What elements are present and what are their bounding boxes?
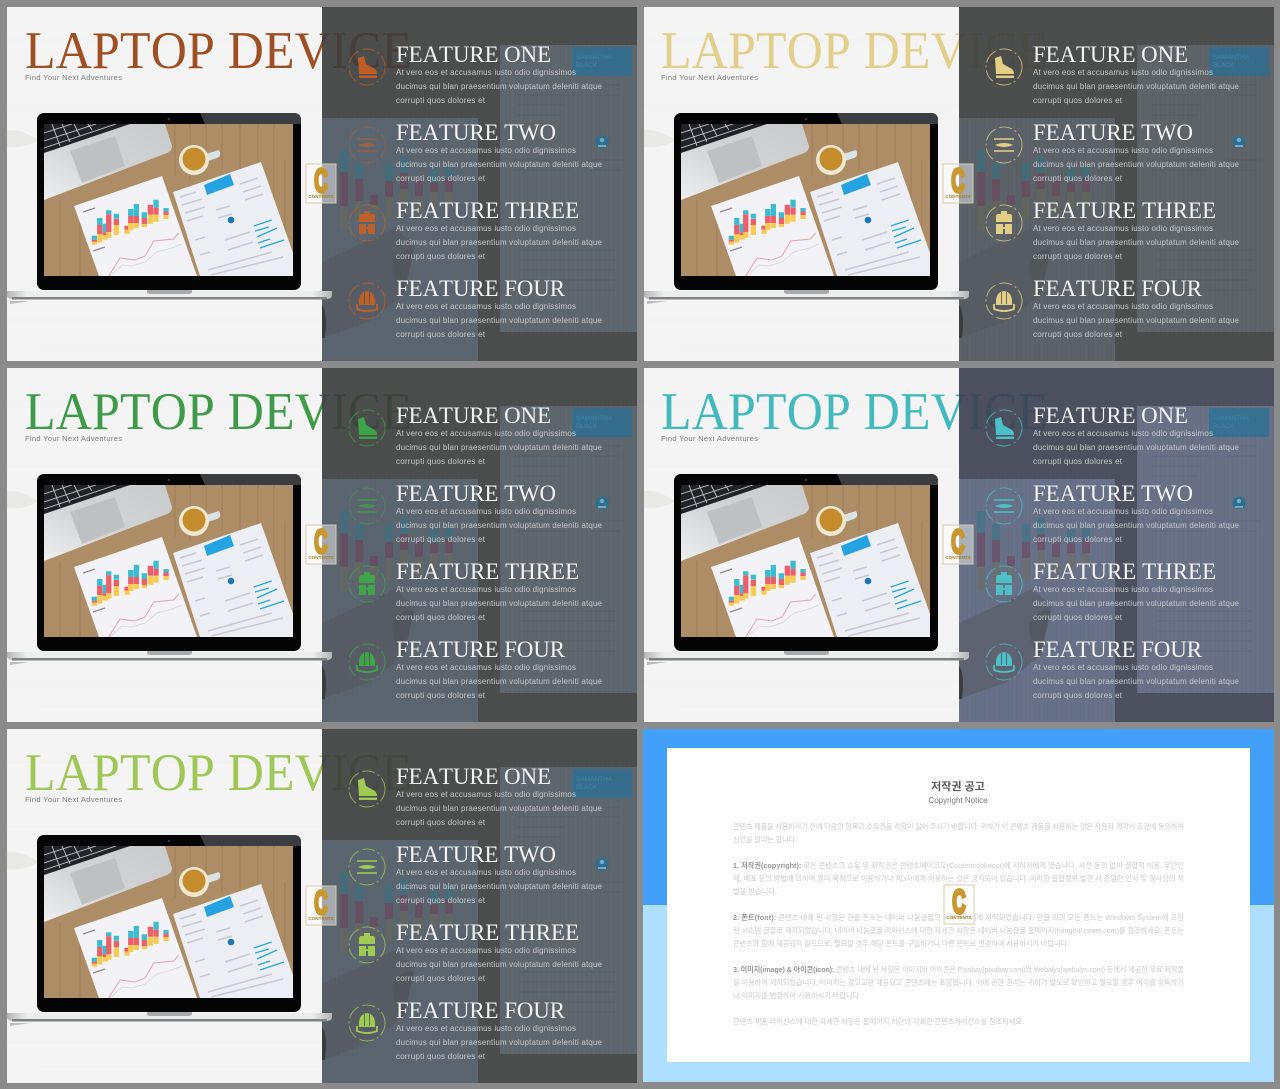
feature two: corrupti quos dolores et	[396, 896, 486, 905]
logo stamp	[306, 883, 336, 925]
feature four: corrupti quos dolores et	[396, 691, 486, 700]
logo stamp	[944, 882, 974, 924]
feature four: At vero eos et accusamus iusto odio dignissimos	[396, 663, 576, 672]
feature two	[349, 120, 603, 183]
slide 1: brown laptop device	[7, 7, 637, 361]
feature three: ducimus qui blan praesentium voluptatum deleniti atque	[396, 960, 603, 969]
slide 4: teal laptop device	[644, 368, 1274, 722]
feature four: FEATURE FOUR	[396, 276, 566, 301]
feature three: corrupti quos dolores et	[396, 613, 486, 622]
title: LAPTOP DEVICE	[25, 383, 412, 441]
feature three: ducimus qui blan praesentium voluptatum deleniti atque	[1033, 238, 1240, 247]
notice item 1: 재, 배포 등의 방법에 의하여 영리 목적으로 이용하거나 제3자에게 이용하는 것은 금지되어 있습니다. 이러한 결합행위 발견 시 준엄한 민사 및 형사상의 처	[733, 874, 1184, 883]
logo stamp	[306, 522, 336, 564]
feature three: FEATURE THREE	[396, 559, 579, 584]
feature four: corrupti quos dolores et	[396, 1052, 486, 1061]
feature four: At vero eos et accusamus iusto odio dignissimos	[1033, 302, 1213, 311]
feature one: corrupti quos dolores et	[1033, 96, 1123, 105]
feature one: corrupti quos dolores et	[1033, 457, 1123, 466]
feature four	[349, 276, 603, 339]
laptop mockup	[7, 835, 332, 1026]
feature two: At vero eos et accusamus iusto odio dignissimos	[396, 868, 576, 877]
feature one: corrupti quos dolores et	[396, 96, 486, 105]
notice item 2: 콘텐츠와 함께 제공되지 않으므로, 필요할 경우 해당 폰트를 구입하거나 다른 폰트로 변경하여 사용하시기 바랍니다.	[733, 939, 1069, 948]
feature three: At vero eos et accusamus iusto odio dignissimos	[396, 946, 576, 955]
notice item 2	[733, 913, 1184, 948]
feature three	[986, 559, 1240, 622]
feature one: ducimus qui blan praesentium voluptatum deleniti atque	[396, 804, 603, 813]
feature four: ducimus qui blan praesentium voluptatum deleniti atque	[1033, 316, 1240, 325]
title: LAPTOP DEVICE	[25, 22, 412, 80]
feature two: ducimus qui blan praesentium voluptatum deleniti atque	[396, 882, 603, 891]
notice item 1: 벌을 받습니다.	[733, 887, 777, 896]
feature one: FEATURE ONE	[396, 764, 551, 789]
subtitle: Find Your Next Adventures	[661, 73, 758, 82]
feature one: FEATURE ONE	[1033, 42, 1188, 67]
title: LAPTOP DEVICE	[25, 744, 412, 802]
panel: white notice card	[667, 748, 1250, 1062]
feature three: At vero eos et accusamus iusto odio dignissimos	[396, 224, 576, 233]
notice item 2: 2. 폰트(font): 콘텐츠 내에 된 사항은 한글 폰트는 네이버 나눔글꼴의 저작권자에게 저작되었습니다. 한글 외의 모든 폰트는 Windows System에 포함	[733, 913, 1184, 922]
feature three	[986, 198, 1240, 261]
panel: dark overlay	[322, 7, 637, 361]
feature three: FEATURE THREE	[1033, 198, 1216, 223]
feature two: corrupti quos dolores et	[1033, 535, 1123, 544]
laptop mockup	[644, 474, 969, 665]
feature three: FEATURE THREE	[1033, 559, 1216, 584]
feature one	[349, 764, 603, 827]
slide 3: green laptop device	[7, 368, 637, 722]
feature one: FEATURE ONE	[396, 403, 551, 428]
feature three: ducimus qui blan praesentium voluptatum deleniti atque	[1033, 599, 1240, 608]
logo stamp	[943, 161, 973, 203]
feature two: At vero eos et accusamus iusto odio dignissimos	[396, 146, 576, 155]
feature four: corrupti quos dolores et	[1033, 691, 1123, 700]
notice intro	[733, 822, 1184, 844]
feature three	[349, 559, 603, 622]
feature two: ducimus qui blan praesentium voluptatum deleniti atque	[396, 160, 603, 169]
feature three: corrupti quos dolores et	[396, 974, 486, 983]
feature two: FEATURE TWO	[1033, 481, 1193, 506]
feature two	[986, 481, 1240, 544]
subtitle: Find Your Next Adventures	[661, 434, 758, 443]
title: LAPTOP DEVICE	[661, 22, 1048, 80]
notice item 1	[733, 861, 1184, 896]
panel: dark overlay	[322, 729, 637, 1083]
notice item 3: 나 이미지를 변경하여 사용하시기 바랍니다.	[733, 991, 861, 1000]
feature one: At vero eos et accusamus iusto odio dignissimos	[1033, 68, 1213, 77]
feature four: At vero eos et accusamus iusto odio dignissimos	[396, 1024, 576, 1033]
notice intro: 선언을 알리는 합니다.	[733, 835, 797, 844]
notice subheading: Copyright Notice	[928, 796, 988, 805]
feature four: ducimus qui blan praesentium voluptatum deleniti atque	[396, 1038, 603, 1047]
feature four	[986, 276, 1240, 339]
feature two: ducimus qui blan praesentium voluptatum deleniti atque	[1033, 521, 1240, 530]
feature three: FEATURE THREE	[396, 920, 579, 945]
feature one	[986, 403, 1240, 466]
feature two: corrupti quos dolores et	[1033, 174, 1123, 183]
laptop mockup	[7, 474, 332, 665]
feature four: FEATURE FOUR	[1033, 637, 1203, 662]
feature three: At vero eos et accusamus iusto odio dignissimos	[396, 585, 576, 594]
panel: dark overlay	[959, 7, 1274, 361]
feature three	[349, 198, 603, 261]
laptop mockup	[7, 113, 332, 304]
notice closing: 콘텐츠 제품 라이선스에 대한 자세한 사항은 홈페이지 하단의 자세한 콘텐츠라이선스를 참조하세요.	[733, 1017, 1024, 1026]
feature four: corrupti quos dolores et	[396, 330, 486, 339]
notice item 3	[733, 965, 1184, 1000]
feature four: FEATURE FOUR	[1033, 276, 1203, 301]
feature two: At vero eos et accusamus iusto odio dignissimos	[396, 507, 576, 516]
feature four: ducimus qui blan praesentium voluptatum deleniti atque	[1033, 677, 1240, 686]
feature two	[349, 481, 603, 544]
feature three: FEATURE THREE	[396, 198, 579, 223]
feature one: At vero eos et accusamus iusto odio dignissimos	[1033, 429, 1213, 438]
feature one	[349, 403, 603, 466]
feature one: At vero eos et accusamus iusto odio dignissimos	[396, 429, 576, 438]
feature one: ducimus qui blan praesentium voluptatum deleniti atque	[1033, 443, 1240, 452]
feature three: At vero eos et accusamus iusto odio dignissimos	[1033, 585, 1213, 594]
feature one: corrupti quos dolores et	[396, 818, 486, 827]
feature one: At vero eos et accusamus iusto odio dignissimos	[396, 790, 576, 799]
feature two: corrupti quos dolores et	[396, 535, 486, 544]
feature two: FEATURE TWO	[396, 481, 556, 506]
notice item 3: 을 이용하여 제작되었습니다. 이미지는 참고교환 제공되고 콘텐츠에는 포함됩니다. 이에 관한 권리는 귀하가 별도로 확인하고 필요할 경우 여기를 취득하거	[733, 978, 1184, 987]
notice item 2: 된 시스템 글꼴로 제작되었습니다. 네이버 나눔글꼴 라이선스에 대한 자세한 사항은 네이버 나눔글꼴 홈페이지(hangeul.naver.com)를 참조하세요. 폰트는	[733, 926, 1184, 935]
subtitle: Find Your Next Adventures	[25, 795, 122, 804]
notice item 3: 3. 이미지(image) & 아이콘(icon): 콘텐츠 내에 된 사항은 이미지와 아이콘은 Pixabay(pixabay.com)와 Webalys(webalys.com) 등에서 제공한 무료 저작물	[733, 965, 1184, 974]
feature two: FEATURE TWO	[1033, 120, 1193, 145]
feature two: ducimus qui blan praesentium voluptatum deleniti atque	[396, 521, 603, 530]
feature two: corrupti quos dolores et	[396, 174, 486, 183]
slide 5: lime laptop device	[7, 729, 637, 1083]
feature four: FEATURE FOUR	[396, 637, 566, 662]
feature four: ducimus qui blan praesentium voluptatum deleniti atque	[396, 677, 603, 686]
feature three: corrupti quos dolores et	[396, 252, 486, 261]
feature three: corrupti quos dolores et	[1033, 613, 1123, 622]
title: LAPTOP DEVICE	[661, 383, 1048, 441]
feature four: ducimus qui blan praesentium voluptatum deleniti atque	[396, 316, 603, 325]
feature two	[349, 842, 603, 905]
feature two	[986, 120, 1240, 183]
subtitle: Find Your Next Adventures	[25, 73, 122, 82]
feature three: corrupti quos dolores et	[1033, 252, 1123, 261]
panel: blue-gray overlay	[959, 368, 1274, 722]
feature four: At vero eos et accusamus iusto odio dignissimos	[396, 302, 576, 311]
logo stamp	[306, 161, 336, 203]
feature three: ducimus qui blan praesentium voluptatum deleniti atque	[396, 599, 603, 608]
feature four: corrupti quos dolores et	[1033, 330, 1123, 339]
feature one	[349, 42, 603, 105]
feature one: ducimus qui blan praesentium voluptatum deleniti atque	[1033, 82, 1240, 91]
feature one	[986, 42, 1240, 105]
feature two: At vero eos et accusamus iusto odio dignissimos	[1033, 146, 1213, 155]
notice heading: 저작권 공고	[931, 779, 985, 793]
notice intro: 콘텐츠 제품을 사용하시기 전에 다음의 항목과 소유권을 사항이 읽어 주시기 바랍니다. 귀하가 이 콘텐츠 제품을 사용하는 것은 사용자 계약서 조건에 동의하여	[733, 822, 1184, 831]
feature one: FEATURE ONE	[1033, 403, 1188, 428]
feature one: ducimus qui blan praesentium voluptatum deleniti atque	[396, 443, 603, 452]
feature one: ducimus qui blan praesentium voluptatum deleniti atque	[396, 82, 603, 91]
feature one: FEATURE ONE	[396, 42, 551, 67]
feature four	[349, 998, 603, 1061]
feature four: At vero eos et accusamus iusto odio dignissimos	[1033, 663, 1213, 672]
feature two: At vero eos et accusamus iusto odio dignissimos	[1033, 507, 1213, 516]
feature two: FEATURE TWO	[396, 842, 556, 867]
feature four	[986, 637, 1240, 700]
feature three: At vero eos et accusamus iusto odio dignissimos	[1033, 224, 1213, 233]
feature one: corrupti quos dolores et	[396, 457, 486, 466]
feature one: At vero eos et accusamus iusto odio dignissimos	[396, 68, 576, 77]
laptop mockup	[644, 113, 969, 304]
feature four	[349, 637, 603, 700]
slide 2: gold laptop device	[644, 7, 1274, 361]
feature four: FEATURE FOUR	[396, 998, 566, 1023]
panel: dark overlay	[322, 368, 637, 722]
feature two: FEATURE TWO	[396, 120, 556, 145]
feature three	[349, 920, 603, 983]
feature three: ducimus qui blan praesentium voluptatum deleniti atque	[396, 238, 603, 247]
feature two: ducimus qui blan praesentium voluptatum deleniti atque	[1033, 160, 1240, 169]
subtitle: Find Your Next Adventures	[25, 434, 122, 443]
slide 6: copyright notice	[643, 729, 1274, 1082]
notice item 1: 1. 저작권(copyright): 모든 콘텐츠의 소유 및 저작권은 콘텐츠메이크오(Contentstokeout)에 저작자에게 있습니다. 사전 동의 없이 결합적 이용, 무단전	[733, 861, 1184, 870]
logo stamp	[943, 522, 973, 564]
